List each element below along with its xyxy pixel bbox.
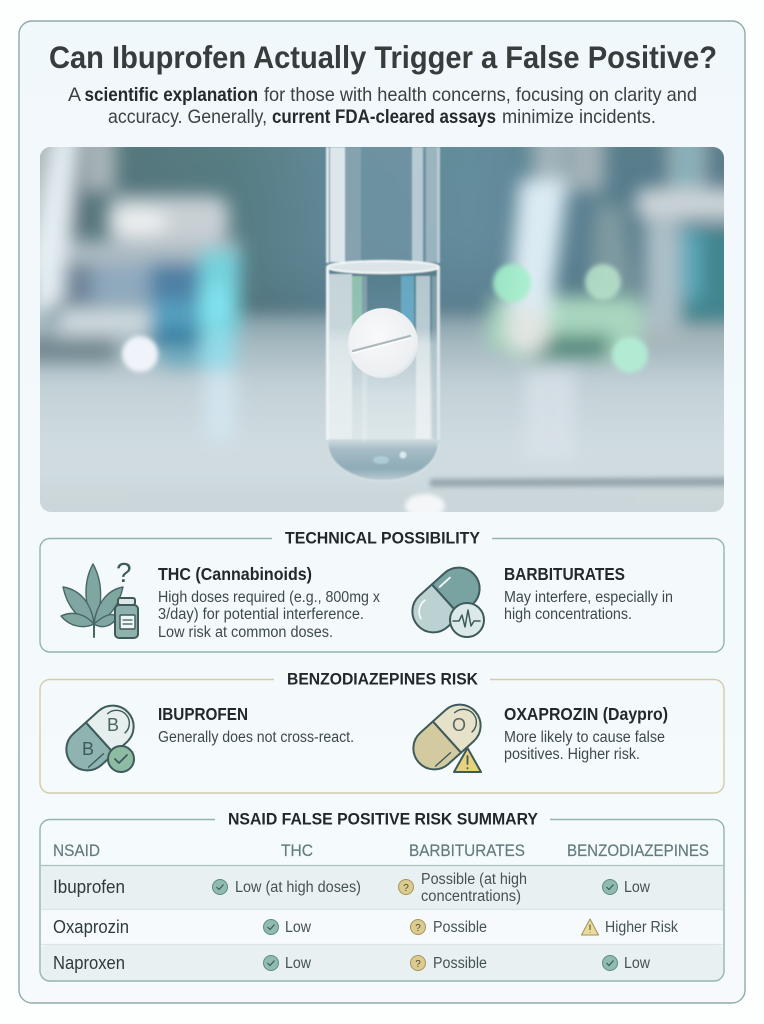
text: oxaprozin: positives. Higher risk.	[504, 746, 640, 763]
icon: capsule with check	[58, 697, 142, 779]
photo: test tube with tablet	[40, 147, 724, 512]
heading: table title: NSAID FALSE POSITIVE RISK SUMMARY	[228, 810, 539, 828]
icon: capsule with warning	[405, 696, 489, 778]
row: naproxen	[53, 953, 651, 973]
row: oxaprozin: Possible	[433, 919, 487, 936]
row: oxaprozin	[53, 917, 678, 937]
row: ibuprofen: Low	[624, 879, 651, 896]
row: oxaprozin: Low	[285, 919, 312, 936]
text: barbiturates: BARBITURATES	[504, 564, 625, 584]
table header row: THC	[281, 841, 313, 860]
subtitle text: current FDA-cleared assays	[272, 106, 496, 128]
text: oxaprozin: More likely to cause false	[504, 729, 665, 746]
subtitle text: accuracy. Generally,	[108, 106, 267, 128]
row: ibuprofen	[53, 871, 651, 905]
text: barbiturates	[504, 564, 673, 623]
row: ibuprofen: Low (at high doses)	[235, 879, 361, 896]
icon: capsule with pulse	[404, 559, 488, 641]
row: oxaprozin: Higher Risk	[605, 919, 678, 936]
row: ibuprofen: concentrations)	[421, 888, 521, 905]
row: ibuprofen: Ibuprofen	[53, 877, 125, 897]
panel: technical possibility	[40, 528, 724, 652]
text: THC: High doses required (e.g., 800mg x	[158, 589, 380, 606]
text: ibuprofen: IBUPROFEN	[158, 704, 248, 724]
row: oxaprozin: ?	[415, 923, 421, 934]
title: Can Ibuprofen Actually Trigger a False Positive?	[49, 39, 717, 75]
text: barbiturates: high concentrations.	[504, 606, 632, 623]
text: THC: Low risk at common doses.	[158, 624, 333, 641]
icon: cannabis leaf and vial: ?	[116, 557, 132, 588]
row: naproxen: Low	[624, 955, 651, 972]
text: barbiturates: May interfere, especially in	[504, 589, 673, 606]
icon: capsule with check: B	[82, 739, 94, 759]
subtitle text: for those with health concerns, focusing on clarity and	[264, 84, 697, 106]
icon: capsule with check: B	[107, 715, 119, 735]
heading: technical possibility: TECHNICAL POSSIBILITY	[285, 528, 481, 548]
row: naproxen: Possible	[433, 955, 487, 972]
row: naproxen: Naproxen	[53, 953, 125, 973]
row: oxaprozin: Oxaprozin	[53, 917, 129, 937]
row: ibuprofen: ?	[403, 883, 409, 894]
table header row: NSAID	[53, 841, 100, 860]
row: naproxen: ?	[415, 959, 421, 970]
text: oxaprozin: OXAPROZIN (Daypro)	[504, 704, 668, 724]
text: oxaprozin	[504, 704, 668, 763]
heading: benzodiazepines risk: BENZODIAZEPINES RISK	[287, 670, 479, 688]
text: THC: THC (Cannabinoids)	[158, 564, 312, 584]
blurred left glassware	[20, 130, 240, 440]
table header row	[53, 841, 709, 860]
test tube	[326, 147, 440, 481]
text: THC: 3/day) for potential interference.	[158, 606, 364, 623]
subtitle text: minimize incidents.	[502, 106, 656, 128]
icon: capsule with warning: O	[452, 715, 466, 735]
subtitle text: A	[68, 84, 81, 106]
table reflections and shadow	[525, 370, 575, 460]
row: ibuprofen: Possible (at high	[421, 871, 527, 888]
row: naproxen: Low	[285, 955, 312, 972]
text: THC	[158, 564, 380, 641]
tablet	[348, 308, 418, 378]
subtitle text	[68, 84, 697, 128]
text: ibuprofen: Generally does not cross-react.	[158, 729, 354, 746]
subtitle text: scientific explanation	[84, 84, 258, 106]
table header row: BENZODIAZEPINES	[567, 841, 709, 860]
icon: cannabis leaf and vial	[61, 557, 138, 638]
panel: benzodiazepines risk	[40, 670, 724, 793]
text: ibuprofen	[158, 704, 354, 746]
blurred right flask and beaker	[486, 130, 744, 360]
panel: NSAID risk summary table	[40, 810, 724, 981]
table header row: BARBITURATES	[409, 841, 525, 860]
